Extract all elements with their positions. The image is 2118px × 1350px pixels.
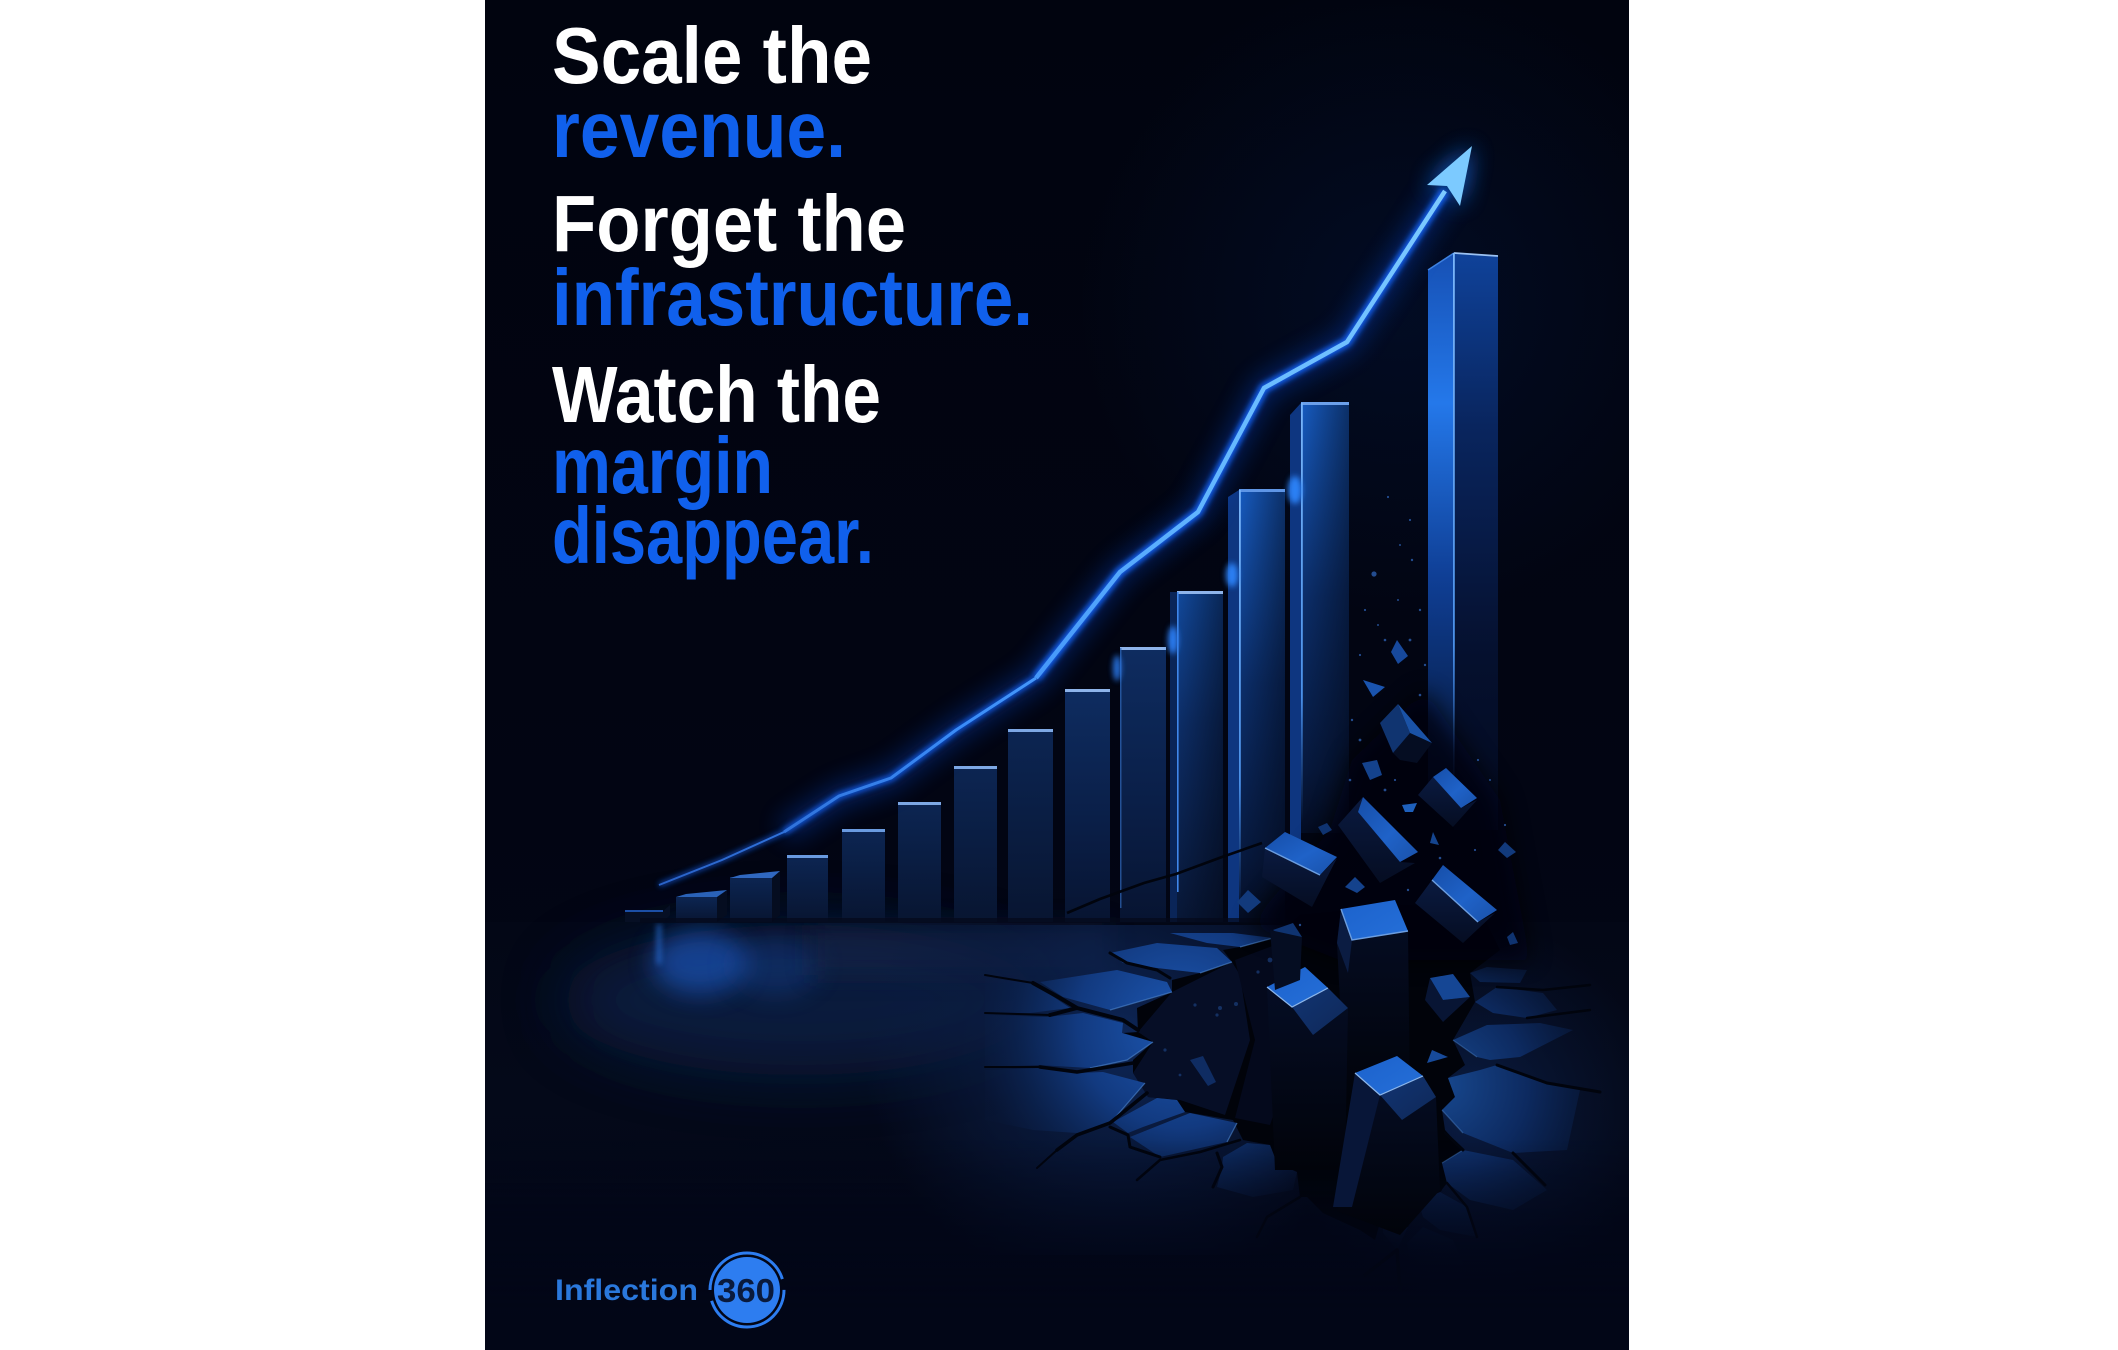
cube E column — [1337, 900, 1409, 1040]
headline line: disappear.: disappear. — [552, 491, 874, 580]
floor cracks — [984, 951, 1602, 1238]
particles — [1299, 496, 1506, 926]
headline line: revenue.: revenue. — [552, 85, 846, 174]
bar 8 — [1065, 689, 1110, 922]
bar 1 — [676, 890, 727, 918]
cube C — [1338, 797, 1418, 883]
crater — [1124, 933, 1494, 1236]
headline line: Watch the: Watch the — [552, 350, 881, 439]
bar base crack — [1067, 843, 1262, 913]
background panel — [485, 0, 1629, 922]
plate rim highlights — [1090, 938, 1477, 1163]
headline line: Forget the: Forget the — [552, 179, 906, 268]
cube F — [1415, 865, 1497, 943]
cube B — [1418, 768, 1477, 827]
rubble: falling cubes — [1237, 496, 1530, 1235]
floor — [542, 872, 1629, 1240]
dark haze behind rubble — [1250, 690, 1530, 960]
cube D — [1262, 832, 1337, 907]
arrowhead — [1427, 146, 1472, 206]
logo wordmark: Inflection — [555, 1274, 698, 1307]
logo: Inflection 360 — [555, 1253, 784, 1327]
bar 5 — [898, 802, 941, 922]
bar reflections on the floor — [560, 924, 1110, 1075]
crater rock wall — [1133, 946, 1274, 1125]
cube G column — [1267, 967, 1348, 1170]
bar 13 — [1428, 253, 1498, 830]
bar 11 — [1226, 489, 1285, 922]
bar 9 — [1113, 647, 1166, 922]
bar 10 — [1168, 591, 1223, 922]
headline line: infrastructure.: infrastructure. — [552, 253, 1033, 342]
bar 0 — [625, 905, 670, 922]
cube I — [1425, 974, 1470, 1022]
cube A — [1380, 704, 1432, 763]
bar 3 — [787, 855, 828, 922]
bar 12 — [1288, 402, 1349, 850]
bar chart — [625, 253, 1498, 923]
logo badge — [710, 1253, 784, 1327]
right floor plates — [1422, 967, 1580, 1224]
left floor plates — [985, 933, 1297, 1197]
glowing growth line with arrow — [659, 146, 1472, 885]
headline — [552, 11, 1033, 580]
headline line: Scale the: Scale the — [552, 11, 872, 100]
bar 2 — [730, 871, 780, 922]
bar 4 — [842, 829, 885, 922]
cube H column — [1333, 1056, 1440, 1235]
floor stub — [1270, 930, 1302, 990]
bar 7 — [1008, 729, 1053, 922]
base strip shade — [640, 918, 1280, 923]
logo badge: 360 — [717, 1272, 775, 1309]
small debris — [1237, 640, 1518, 1063]
poster — [485, 0, 1629, 1350]
headline line: margin: margin — [552, 421, 773, 510]
bottom fade of the floor — [485, 1140, 1629, 1310]
bar 6 — [954, 766, 997, 922]
